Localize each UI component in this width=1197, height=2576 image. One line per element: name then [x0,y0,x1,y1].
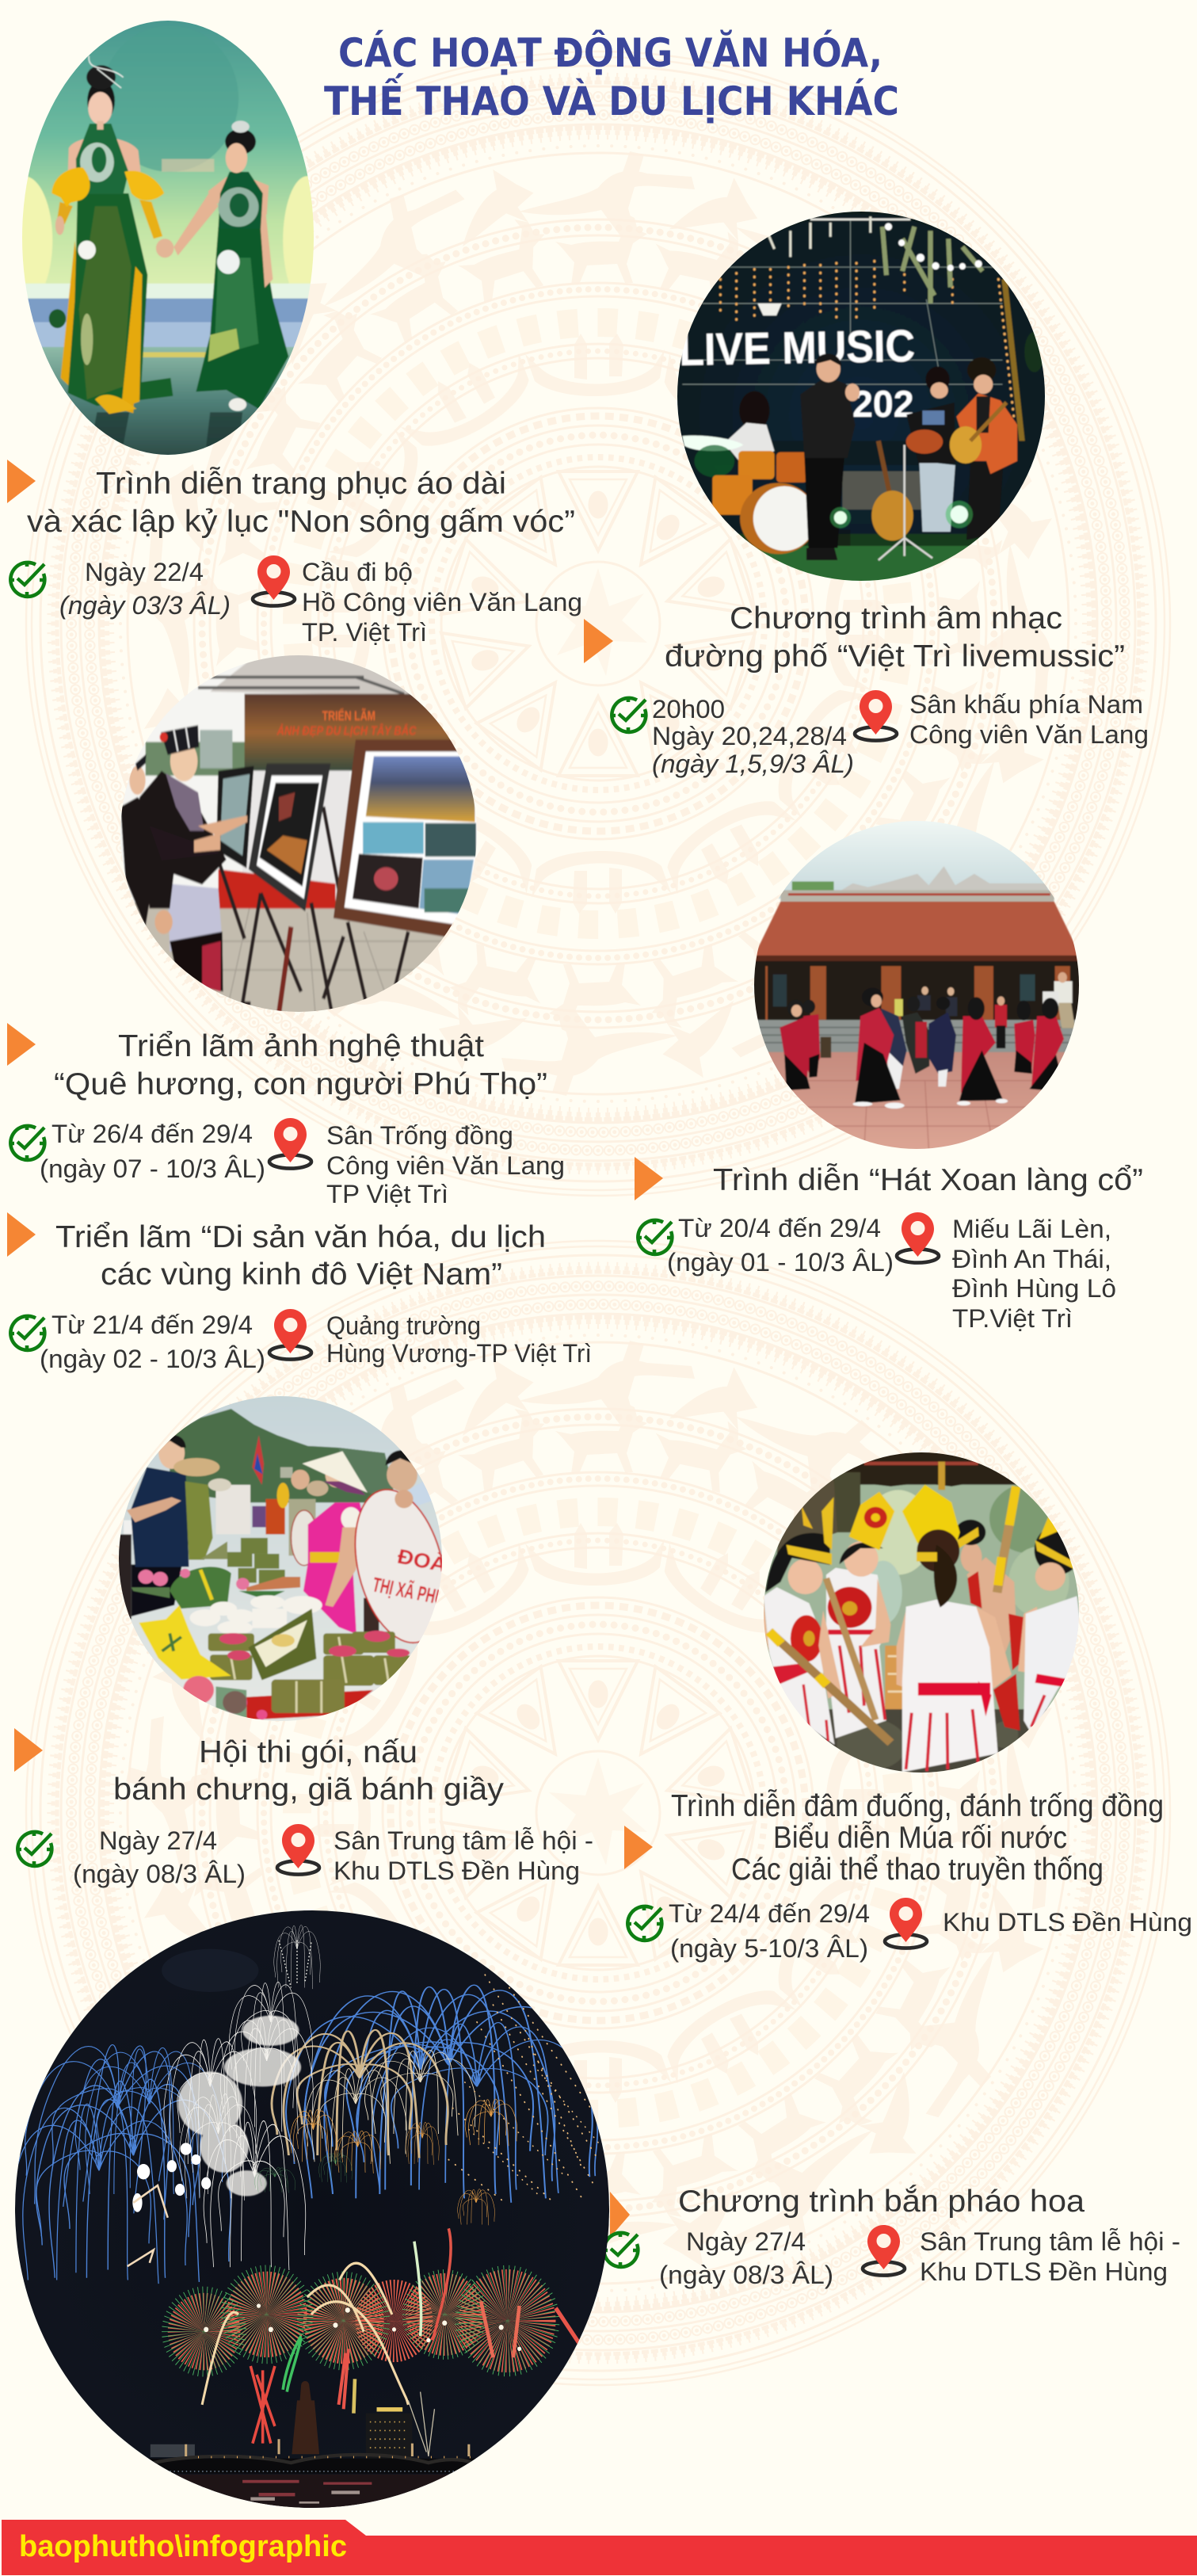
photo: Xoan singers at temple [746,815,1088,1151]
drummer [739,391,770,424]
blue and gold fans right [286,1985,597,2203]
location text: TP Việt Trì [326,1180,448,1208]
icon: clock [17,1832,51,1866]
man [132,1564,182,1616]
heading: “Quê hương, con người Phú Thọ” [54,1067,547,1101]
red and green band [184,2228,580,2456]
date text: Ngày 27/4 [686,2227,806,2256]
icon: clock [627,1906,661,1941]
photo: bánh chưng contest: THỊ XÃ PHÚ [370,1572,447,1609]
heading: Hội thi gói, nấu [199,1735,417,1769]
panel: áo dài fashion show [0,0,582,647]
location text [952,1215,1116,1333]
icon: map pin [863,2225,905,2276]
heading: và xác lập kỷ lục "Non sông gấm vóc” [27,505,575,539]
heading: Trình diễn trang phục áo dài [96,467,506,501]
panel: fireworks [0,1902,1180,2525]
footer credit: baophutho\infographic [19,2530,347,2563]
crowd [215,1485,250,1534]
panel: Xoan singing [635,815,1143,1333]
woman [94,411,242,447]
heading: Biểu diễn Múa rối nước [773,1821,1067,1855]
icon: map pin [855,690,897,741]
date text [73,1826,246,1888]
location text: Hùng Vương-TP Việt Trì [326,1339,592,1368]
date text: (ngày 5-10/3 ÂL) [670,1934,868,1963]
photo: bánh chưng contest [112,1389,465,1725]
date text: (ngày 01 - 10/3 ÂL) [667,1248,894,1277]
location text: Khu DTLS Đền Hùng [334,1857,580,1885]
date text: Từ 20/4 đến 29/4 [678,1214,881,1242]
left girl [764,1587,834,1745]
heading: Trình diễn “Hát Xoan làng cổ” [713,1163,1143,1197]
date text: 20h00 [652,695,725,723]
background people [1054,981,1073,1003]
heading [665,601,1125,674]
arrow [624,1826,653,1869]
location text: Cầu đi bộ [302,558,413,586]
date text: (ngày 08/3 ÂL) [659,2261,833,2289]
middle girl [826,1568,888,1738]
girl [196,227,288,409]
stacks of cake [227,1538,285,1585]
location text: TP. Việt Trì [302,618,427,647]
heading [54,1029,547,1101]
date text: (ngày 02 - 10/3 ÂL) [40,1345,265,1373]
location text [302,558,582,647]
location text: Khu DTLS Đền Hùng [943,1908,1192,1937]
location text: Hồ Công viên Văn Lang [302,588,582,616]
location text [326,1121,565,1208]
location text [909,690,1149,749]
pink woman [303,1561,356,1634]
location text: Khu DTLS Đền Hùng [920,2257,1168,2286]
heading [55,1220,546,1292]
camo person [185,1481,213,1560]
icon: map pin [885,1898,927,1948]
date text: Ngày 27/4 [99,1826,217,1855]
title: THẾ THAO VÀ DU LỊCH KHÁC [324,73,899,124]
icon: map pin [269,1309,311,1360]
title [324,29,899,124]
date text: (ngày 08/3 ÂL) [73,1860,246,1888]
photo: live music band: 202 [852,384,914,425]
guitarist 2 [966,461,1003,540]
singers [787,999,804,1017]
location text: Đình An Thái, [952,1245,1111,1273]
date text: (ngày 03/3 ÂL) [59,591,231,620]
date text: Ngày 20,24,28/4 [652,722,847,750]
photo: rice pounding performers [758,1448,1092,1776]
tower, buildings, bridge, water [292,2381,319,2454]
heading: bánh chưng, giã bánh giầy [113,1773,505,1807]
arrow [14,1728,43,1772]
date text: Ngày 22/4 [85,558,204,586]
date text [652,695,854,778]
date text: (ngày 1,5,9/3 ÂL) [652,750,854,778]
blue fans left [11,2036,231,2284]
location text [920,2227,1180,2286]
icon: map pin [277,1824,319,1875]
heading: Triển lãm “Di sản văn hóa, du lịch [55,1220,546,1254]
location text: Sân Trung tâm lễ hội - [334,1826,593,1855]
right boy behind [966,1557,1016,1673]
icon: clock [10,563,44,597]
icon: clock [638,1220,672,1254]
heading: đường phố “Việt Trì livemussic” [665,639,1125,674]
location text: Đình Hùng Lô [952,1274,1116,1303]
date text [659,2227,833,2289]
heading [671,1789,1164,1887]
photo: fireworks over tower [0,1902,634,2525]
wrapped cakes [208,1631,412,1715]
flowers [139,1605,231,1679]
panel: rice pounding and drums [624,1448,1192,1963]
man with sign [381,1481,436,1514]
photo: exhibition visitors: ẢNH ĐẸP DU LỊCH TÂY BẮC [276,723,417,738]
arrow [635,1157,663,1200]
arrow [584,619,613,663]
date text: Từ 21/4 đến 29/4 [51,1311,253,1339]
icon: clock [604,2233,638,2267]
location text: Quảng trường [326,1311,481,1340]
icon: clock [10,1126,44,1160]
icon: clock [10,1316,44,1350]
icon: map pin [897,1212,939,1263]
back girl [897,1610,925,1693]
location text: Sân Trống đồng [326,1121,513,1150]
location text [334,1826,593,1885]
location text: Miếu Lãi Lèn, [952,1215,1111,1243]
acoustic guitar and stand [879,441,890,498]
date text [667,1214,894,1277]
gold sprays [290,2099,517,2225]
location text: Công viên Văn Lang [909,720,1149,749]
photo: áo dài models [22,21,314,455]
location text: TP.Việt Trì [952,1304,1073,1333]
arrow [610,2192,630,2238]
heading: Chương trình bắn pháo hoa [678,2185,1085,2219]
heading [113,1735,505,1807]
stage lights [830,507,851,529]
photo: live music band: LIVE MUSIC [679,322,916,376]
icon: clock [612,698,646,732]
location text: Công viên Văn Lang [326,1151,565,1180]
date text [40,1311,265,1373]
right figure [1018,1607,1039,1674]
panel: heritage exhibition [7,1212,592,1373]
panel: bánh chưng contest [14,1389,593,1888]
heading: Chương trình âm nhạc [730,601,1062,635]
icon: map pin [269,1118,311,1169]
location text: Sân khấu phía Nam [909,690,1143,719]
heading [27,467,575,539]
photo: live music band [670,207,1050,586]
photo: exhibition visitors [113,648,485,1023]
photo: bánh chưng contest: ĐOÀN [395,1544,465,1580]
date text: Từ 26/4 đến 29/4 [51,1120,253,1148]
arrow [7,1212,36,1257]
heading: Các giải thể thao truyền thống [731,1853,1104,1887]
panel: art photo exhibition [7,648,565,1208]
location text: Sân Trung tâm lễ hội - [920,2227,1180,2256]
guitarist 1 [919,461,955,532]
arrow [7,460,36,503]
arrow [7,1023,36,1066]
date text [40,1120,265,1183]
heading: Triển lãm ảnh nghệ thuật [118,1029,484,1063]
gold sparks [448,1975,602,2203]
date text [59,558,231,620]
singer [804,457,844,548]
women [120,797,190,927]
panel: street music [584,207,1149,778]
location text [326,1311,592,1368]
title: CÁC HOẠT ĐỘNG VĂN HÓA, [338,29,883,76]
footer bar [2,2520,1197,2575]
date text: (ngày 07 - 10/3 ÂL) [40,1154,265,1183]
icon: map pin [253,555,295,606]
white cakes [189,1595,322,1635]
photo: exhibition visitors: TRIỂN LÃM [322,707,375,723]
date text [669,1899,870,1963]
date text: Từ 24/4 đến 29/4 [669,1899,870,1928]
heading: các vùng kinh đô Việt Nam” [101,1257,502,1292]
white bursts [177,2016,301,2196]
